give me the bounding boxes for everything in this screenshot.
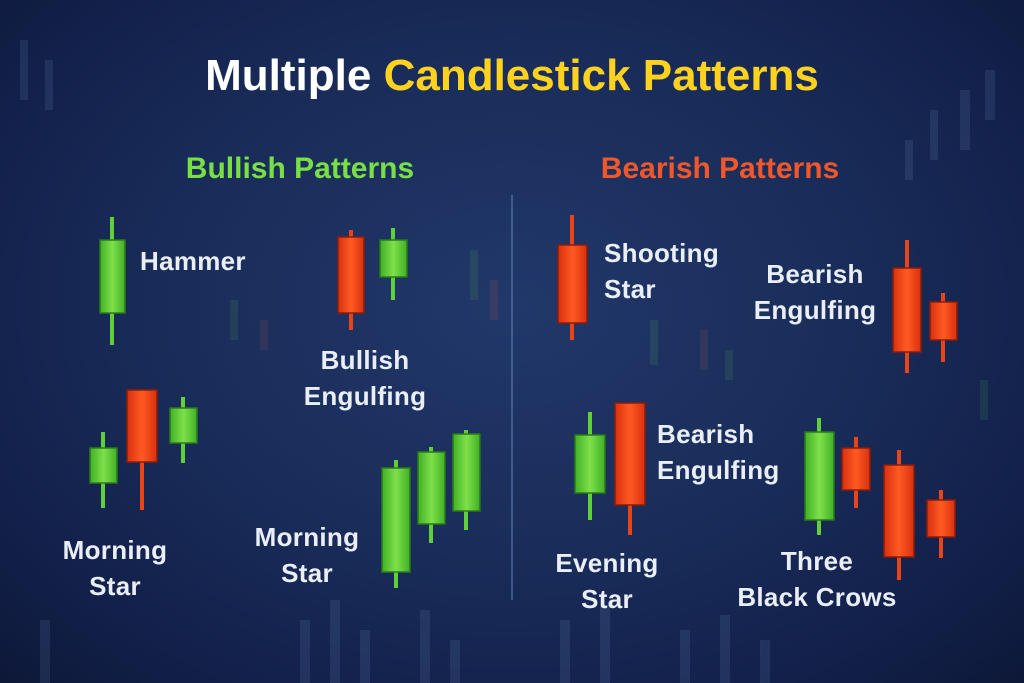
label: evening star [555, 548, 659, 614]
label: bullish engulfing: Bullish [321, 345, 409, 375]
candles: morning star right [382, 430, 480, 588]
label: morning star left: Star [89, 571, 141, 601]
label: bullish engulfing: Engulfing [304, 381, 426, 411]
label: bearish engulfing mid [657, 419, 780, 485]
label: hammer: Hammer [140, 246, 246, 276]
label: three black crows [737, 546, 897, 612]
label: bearish engulfing mid: Engulfing [657, 455, 780, 485]
label: morning star right: Morning [255, 522, 359, 552]
candle: hammer [100, 217, 125, 345]
candles: three black crows [805, 418, 955, 580]
label: shooting star: Shooting [604, 238, 719, 268]
candle: shooting star [558, 215, 587, 340]
label: evening star: Star [581, 584, 633, 614]
label: evening star: Evening [555, 548, 659, 578]
label: bearish engulfing top: Bearish [766, 259, 864, 289]
heading: bullish: Bullish Patterns [186, 152, 414, 185]
label: bearish engulfing mid: Bearish [657, 419, 754, 449]
label: morning star left [63, 535, 167, 601]
label: bearish engulfing top: Engulfing [754, 295, 876, 325]
label: bullish engulfing [304, 345, 426, 411]
label: morning star right [255, 522, 359, 588]
candles: evening star [575, 403, 645, 535]
divider [511, 195, 513, 600]
label: bearish engulfing top [754, 259, 876, 325]
heading: bearish: Bearish Patterns [601, 152, 839, 185]
candles: bullish engulfing [338, 228, 407, 330]
candles: bearish engulfing top [893, 240, 957, 373]
label: shooting star: Star [604, 274, 656, 304]
label: three black crows: Black Crows [737, 582, 897, 612]
label: morning star left: Morning [63, 535, 167, 565]
title: Multiple Candlestick Patterns [205, 51, 819, 100]
label: shooting star [604, 238, 719, 304]
label: three black crows: Three [781, 546, 853, 576]
label: morning star right: Star [281, 558, 333, 588]
candles: morning star left [90, 390, 197, 510]
